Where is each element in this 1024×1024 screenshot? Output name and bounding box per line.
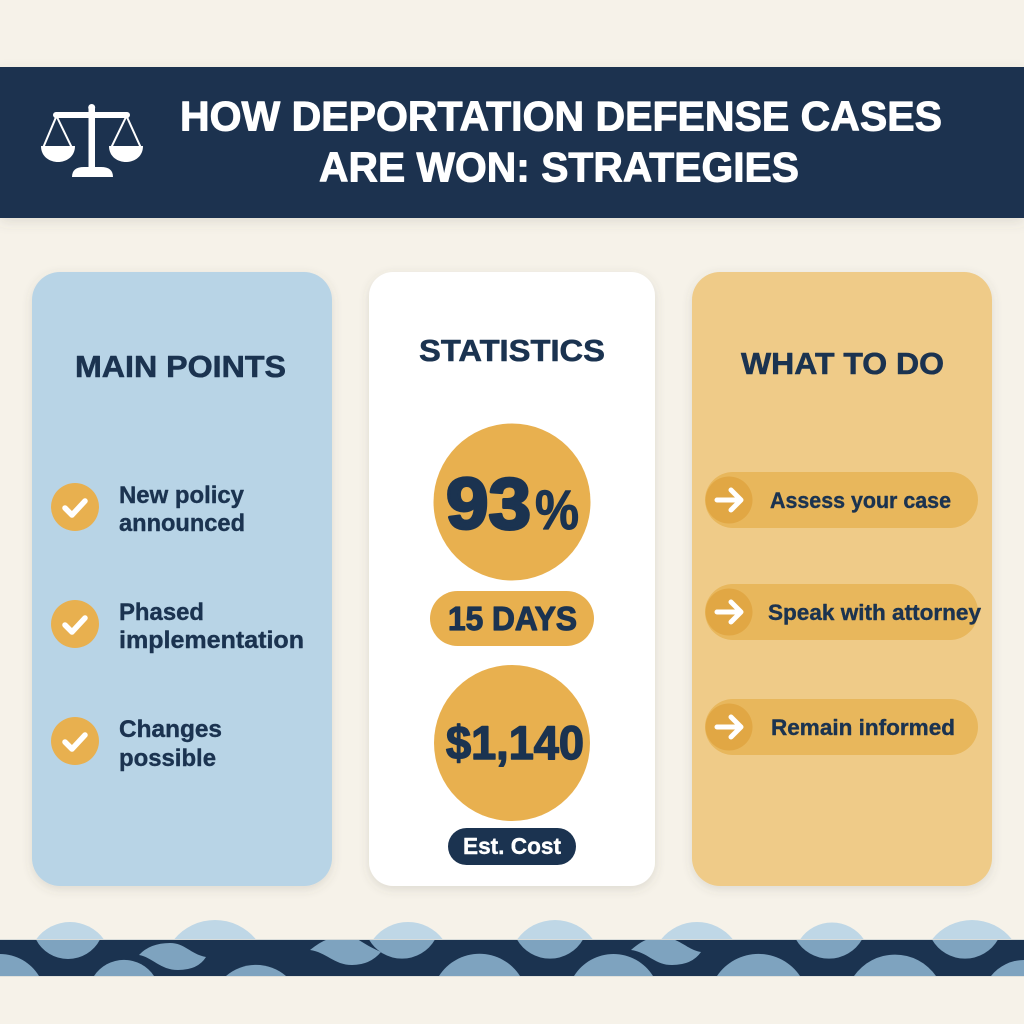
heading: what to do: WHAT TO DO <box>741 346 944 381</box>
label: est. cost: Est. Cost <box>463 833 561 859</box>
panel: main points <box>32 272 332 886</box>
stat: 93%: 93 <box>446 464 531 544</box>
panel: statistics <box>369 272 655 886</box>
action: speak with attorney <box>705 584 981 640</box>
title <box>180 92 942 190</box>
wave band footer <box>0 920 1024 977</box>
point: new policy announced: New policy <box>119 482 244 509</box>
stat: 15 days <box>430 591 594 646</box>
heading: main points: MAIN POINTS <box>75 349 286 384</box>
point: changes possible: Changes <box>119 716 222 743</box>
point: new policy announced: announced <box>119 510 245 537</box>
action: remain informed: Remain informed <box>771 715 955 740</box>
stat: 15 days: 15 DAYS <box>448 600 577 637</box>
icon: scales of justice <box>41 104 143 177</box>
stat: 93% <box>434 424 590 580</box>
action: speak with attorney: Speak with attorney <box>768 600 981 625</box>
label: est. cost <box>448 828 576 865</box>
title: ARE WON: STRATEGIES <box>319 144 799 190</box>
point: new policy announced <box>51 482 245 537</box>
action: assess your case: Assess your case <box>770 488 951 513</box>
action: assess your case <box>705 472 978 528</box>
point: phased implementation: implementation <box>119 627 304 654</box>
point: changes possible: possible <box>119 745 216 772</box>
action: remain informed <box>705 699 978 755</box>
point: phased implementation: Phased <box>119 599 204 626</box>
header banner <box>0 67 1024 218</box>
stat: 93%: % <box>535 478 579 541</box>
panel: what to do <box>692 272 992 886</box>
stat: $1,140: $1,140 <box>446 716 584 769</box>
stat: $1,140 <box>434 665 590 821</box>
title: HOW DEPORTATION DEFENSE CASES <box>180 92 942 140</box>
heading: statistics: STATISTICS <box>419 333 605 368</box>
point: changes possible <box>51 716 222 772</box>
point: phased implementation <box>51 599 304 654</box>
